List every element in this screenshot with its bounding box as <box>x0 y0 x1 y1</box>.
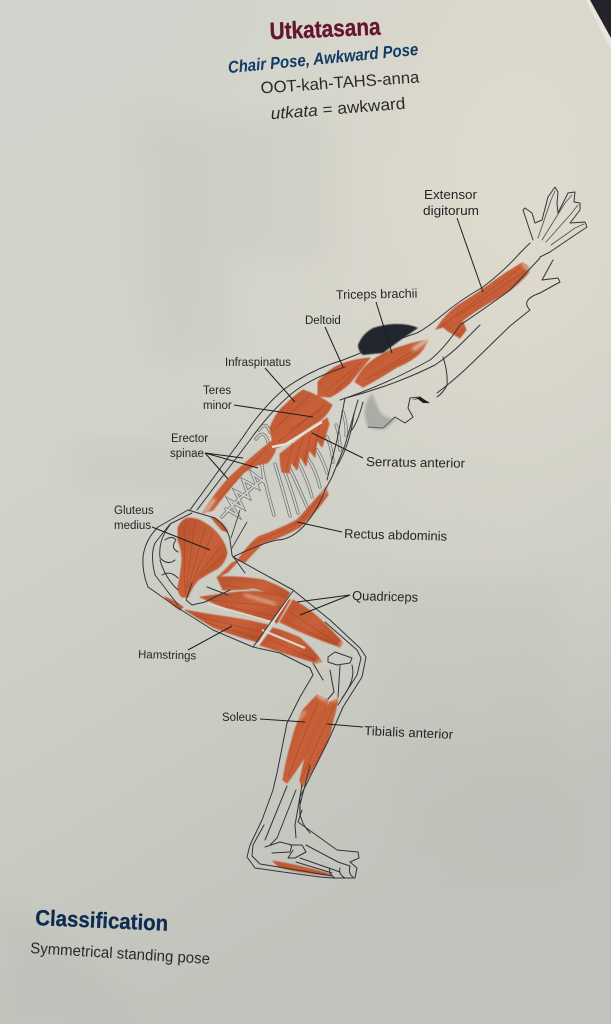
hand <box>523 187 587 257</box>
label: teres minor: Teres <box>203 385 231 397</box>
thigh and knee <box>233 557 366 815</box>
tendon strap across scapula <box>272 422 322 447</box>
muscle labels: digitorum <box>423 203 479 218</box>
ribs and spine <box>222 412 346 517</box>
pelvis and hip <box>143 510 188 608</box>
label: triceps brachii: Triceps brachii <box>336 287 417 302</box>
muscle: erector spinae <box>203 440 275 513</box>
back and arm top line <box>190 243 530 510</box>
muscle fibres <box>184 268 525 782</box>
muscle: tibialis anterior <box>300 698 338 787</box>
tendon strap across thigh <box>208 591 305 648</box>
lower leg bones <box>265 765 310 845</box>
foot <box>298 810 359 878</box>
muscle: deltoid <box>318 358 370 397</box>
front arm and thumb <box>437 260 560 393</box>
muscle: gluteus medius <box>178 518 227 597</box>
hair <box>358 324 418 355</box>
muscle: quadriceps <box>217 577 290 600</box>
leader lines <box>152 218 483 727</box>
chest and abdomen <box>233 400 358 557</box>
femur and hip joint <box>186 583 230 605</box>
subtitle: pose names: Chair Pose, Awkward Pose <box>227 40 419 77</box>
classification text: Symmetrical standing pose <box>30 940 210 968</box>
face <box>368 397 428 428</box>
muscle: foot <box>273 861 332 875</box>
muscle: serratus anterior <box>280 418 329 473</box>
label: serratus anterior: Serratus anterior <box>366 454 466 471</box>
muscle: hamstrings <box>185 610 268 642</box>
label: hamstrings: Hamstrings <box>138 649 197 663</box>
label: quadriceps: Quadriceps <box>352 588 419 605</box>
title: Utkatasana <box>269 14 382 45</box>
label: erector spinae: spinae <box>170 448 204 460</box>
label: teres minor: minor <box>203 400 232 412</box>
label: extensor digitorum: Extensor <box>424 187 478 202</box>
translation: utkata = awkward <box>270 95 406 123</box>
classification heading: Classification <box>35 905 169 936</box>
beard <box>365 393 396 430</box>
label: deltoid: Deltoid <box>305 315 341 327</box>
muscle tendon highlights <box>205 264 531 720</box>
muscle: soleus <box>283 695 328 783</box>
label: soleus: Soleus <box>222 712 257 724</box>
muscle labels <box>114 187 479 742</box>
label: gluteus medius: medius <box>114 520 151 532</box>
pronunciation: OOT-kah-TAHS-anna <box>260 68 421 98</box>
muscle: infraspinatus and teres <box>270 390 332 448</box>
label: tibialis anterior: Tibialis anterior <box>364 723 454 742</box>
muscle: iliopsoas <box>218 560 239 577</box>
label: erector spinae: Erector <box>171 433 208 445</box>
eye <box>412 397 430 403</box>
muscle: rectus abdominis <box>238 487 328 562</box>
muscle: triceps <box>355 340 428 387</box>
label: infraspinatus: Infraspinatus <box>225 357 291 369</box>
muscle: extensor digitorum <box>436 263 529 329</box>
muscles <box>165 263 529 875</box>
label: rectus abdominis: Rectus abdominis <box>344 526 448 544</box>
label: gluteus medius: Gluteus <box>114 505 154 517</box>
patella <box>328 652 352 665</box>
body outline <box>143 187 587 878</box>
anatomy figure <box>143 187 587 878</box>
